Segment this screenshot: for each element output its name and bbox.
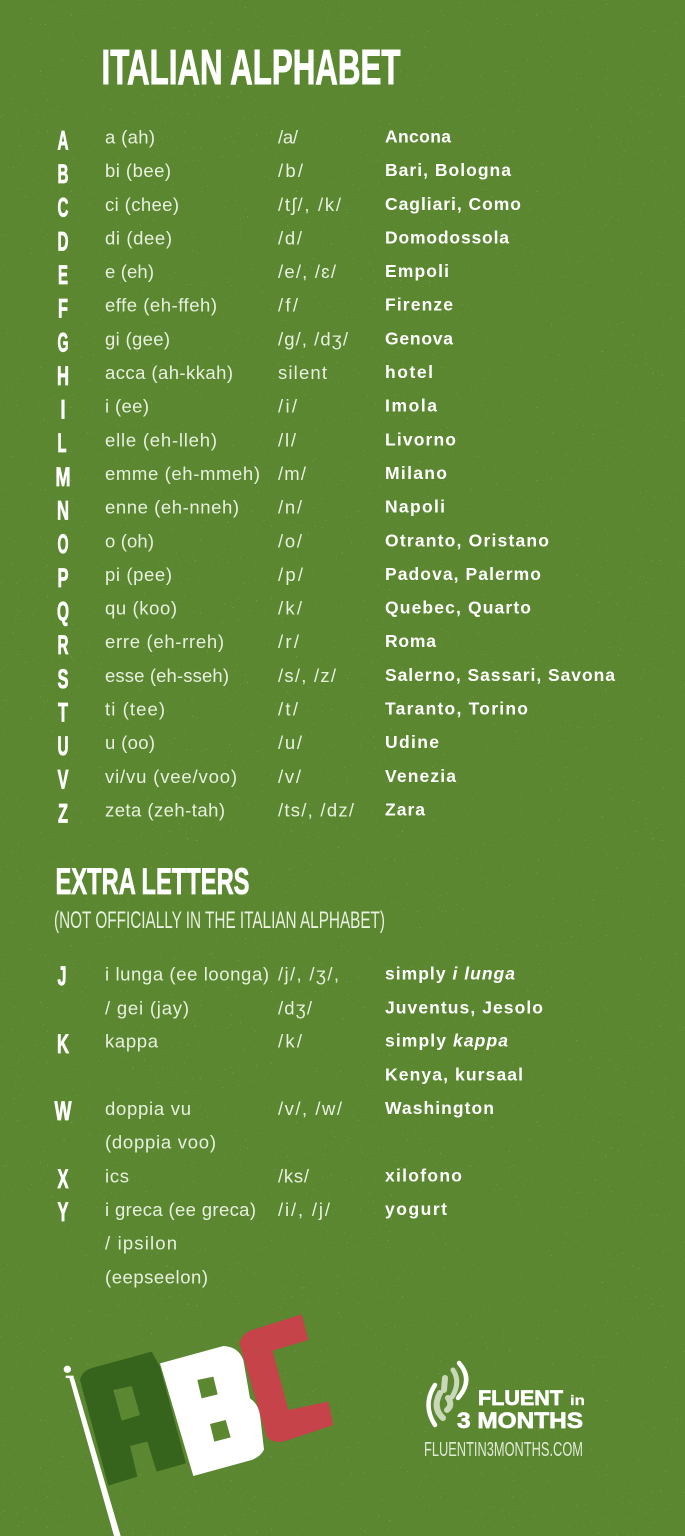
alphabet table (56, 126, 615, 828)
row F: F (58, 294, 68, 324)
row O: /o/ (278, 530, 303, 551)
row W: /v/, /w/ (278, 1098, 343, 1119)
row I: /i/ (278, 396, 298, 417)
row T: Taranto, Torino (385, 698, 528, 718)
row B: B (58, 159, 68, 189)
row F: effe (eh-ffeh) (105, 295, 217, 316)
logo: Fluent in 3 Months (424, 1363, 585, 1461)
row D: D (58, 226, 68, 256)
logo icon: sound waves (428, 1363, 466, 1425)
row P (58, 563, 541, 593)
row Y (58, 1197, 447, 1288)
row Z (58, 798, 425, 828)
row Q: /k/ (278, 598, 303, 619)
row F: Firenze (385, 295, 453, 315)
row I: i (ee) (105, 396, 149, 417)
row J: simply i lunga (385, 964, 515, 984)
row P: pi (pee) (105, 564, 172, 585)
row W: doppia vu (105, 1098, 191, 1119)
row E: Empoli (385, 261, 449, 281)
row L: Livorno (385, 429, 456, 449)
row N (57, 496, 445, 526)
row I (60, 395, 437, 425)
row P: Padova, Palermo (385, 564, 541, 584)
row J: J (58, 961, 66, 991)
row Q: Q (57, 596, 69, 626)
row Y: (eepseelon) (105, 1266, 208, 1288)
row I: I (60, 395, 66, 425)
row I: Imola (385, 396, 437, 416)
letter A dark green (80, 1352, 186, 1486)
row A: A (58, 126, 68, 156)
row X (58, 1164, 462, 1194)
row N: Napoli (385, 497, 445, 517)
row X: ics (105, 1166, 129, 1186)
logo wordmark: 3 MONTHS (457, 1408, 583, 1433)
row V: /v/ (278, 766, 302, 787)
row B: Bari, Bologna (385, 160, 511, 180)
row Y: yogurt (385, 1199, 447, 1219)
row V: Venezia (385, 766, 456, 786)
row M (56, 462, 447, 492)
logo wordmark: in (570, 1392, 585, 1408)
row U (58, 731, 439, 761)
row U: Udine (385, 732, 439, 752)
row E: E (58, 260, 68, 290)
row G (58, 327, 453, 357)
row C (58, 193, 521, 223)
row G: G (58, 327, 68, 357)
row D (58, 226, 509, 256)
title: ITALIAN ALPHABET (102, 41, 401, 95)
row U: u (oo) (105, 732, 155, 753)
row H: silent (278, 362, 327, 383)
row N: /n/ (278, 497, 303, 518)
row G: gi (gee) (105, 328, 170, 349)
row G: /g/, /dʒ/ (278, 328, 349, 349)
row E (58, 260, 449, 290)
row V: V (58, 765, 68, 795)
row R: R (58, 630, 68, 660)
letter B white (160, 1346, 264, 1476)
row C: ci (chee) (105, 194, 179, 215)
row W: Washington (385, 1098, 494, 1118)
row B: /b/ (278, 160, 304, 181)
row C: Cagliari, Como (385, 194, 521, 214)
row S: Salerno, Sassari, Savona (385, 665, 615, 685)
illustration: ABC flag (64, 1314, 333, 1536)
row O: Otranto, Oristano (385, 530, 549, 550)
row D: Domodossola (385, 227, 509, 247)
row T: T (58, 697, 68, 727)
row Q (57, 596, 531, 626)
row A: a (ah) (105, 126, 155, 148)
extra letters table (54, 961, 543, 1288)
row S: S (58, 664, 68, 694)
row W: (doppia voo) (105, 1132, 216, 1152)
row L: /l/ (278, 429, 297, 450)
row J (58, 961, 543, 1018)
row D: di (dee) (105, 227, 172, 248)
row V (58, 765, 456, 795)
row Y: i greca (ee greca) (105, 1199, 256, 1220)
row W (54, 1096, 494, 1152)
row O: O (58, 529, 68, 559)
row M: /m/ (278, 463, 307, 484)
row X: /ks/ (278, 1166, 310, 1186)
row R: Roma (385, 631, 436, 651)
row P: /p/ (278, 564, 304, 585)
row K: kappa (105, 1030, 159, 1052)
row U: /u/ (278, 732, 303, 753)
row Z: Z (58, 798, 68, 828)
row X: xilofono (385, 1166, 462, 1186)
row U: U (58, 731, 68, 761)
row D: /d/ (278, 227, 303, 248)
row N: enne (eh-nneh) (105, 497, 239, 518)
flag pole (64, 1366, 121, 1536)
row Q: Quebec, Quarto (385, 598, 531, 618)
row Y: Y (58, 1197, 68, 1227)
row J: /j/, /ʒ/, (278, 964, 339, 984)
logo wordmark: FLUENT (478, 1387, 563, 1410)
row G: Genova (385, 328, 453, 348)
row H (57, 361, 433, 391)
row O: o (oh) (105, 530, 154, 551)
row P: P (58, 563, 68, 593)
row S (58, 664, 615, 694)
row S: /s/, /z/ (278, 665, 337, 686)
row K: Kenya, kursaal (385, 1064, 523, 1084)
row Q: qu (koo) (105, 598, 177, 619)
row F (58, 294, 453, 324)
row H: H (57, 361, 69, 391)
row S: esse (eh-sseh) (105, 665, 229, 686)
row A: Ancona (385, 126, 451, 146)
row T: /t/ (278, 698, 299, 720)
row E: /e/, /ɛ/ (278, 261, 337, 282)
row T: ti (tee) (105, 698, 165, 720)
row E: e (eh) (105, 261, 154, 282)
row X: X (58, 1164, 68, 1194)
row H: acca (ah-kkah) (105, 362, 233, 383)
row Z: Zara (385, 800, 425, 820)
row K: simply kappa (385, 1030, 508, 1050)
row J: i lunga (ee loonga) (105, 964, 269, 984)
row L (58, 428, 456, 458)
row T (58, 697, 528, 727)
row M: emme (eh-mmeh) (105, 463, 260, 484)
row C: C (58, 193, 68, 223)
row C: /tʃ/, /k/ (278, 194, 342, 215)
row R: /r/ (278, 631, 300, 652)
row V: vi/vu (vee/voo) (105, 766, 237, 787)
letter C red (239, 1314, 333, 1442)
row J: Juventus, Jesolo (385, 998, 543, 1018)
row R (58, 630, 436, 660)
logo url: FLUENTIN3MONTHS.COM (424, 1439, 583, 1461)
row Y: /i/, /j/ (278, 1199, 331, 1220)
row Z: /ts/, /dz/ (278, 800, 355, 820)
row K: /k/ (278, 1030, 303, 1052)
row L: L (58, 428, 66, 458)
row R: erre (eh-rreh) (105, 631, 224, 652)
row N: N (57, 496, 69, 526)
row H: hotel (385, 362, 433, 382)
row W: W (54, 1096, 72, 1126)
row J: /dʒ/ (278, 998, 313, 1018)
row F: /f/ (278, 295, 299, 316)
row K: K (57, 1029, 69, 1059)
logo wordmark (457, 1387, 585, 1433)
subheading: (NOT OFFICIALLY IN THE ITALIAN ALPHABET) (54, 907, 385, 934)
row M: M (56, 462, 70, 492)
row O (58, 529, 549, 559)
row K (57, 1029, 523, 1084)
row Y: / ipsilon (105, 1232, 177, 1254)
row L: elle (eh-lleh) (105, 429, 217, 450)
row A: /a/ (278, 126, 299, 148)
row Z: zeta (zeh-tah) (105, 800, 225, 820)
row M: Milano (385, 463, 447, 483)
row B (58, 159, 511, 189)
row J: / gei (jay) (105, 998, 189, 1018)
row B: bi (bee) (105, 160, 171, 181)
row A (58, 126, 451, 156)
heading: extra letters: EXTRA LETTERS (56, 861, 250, 902)
